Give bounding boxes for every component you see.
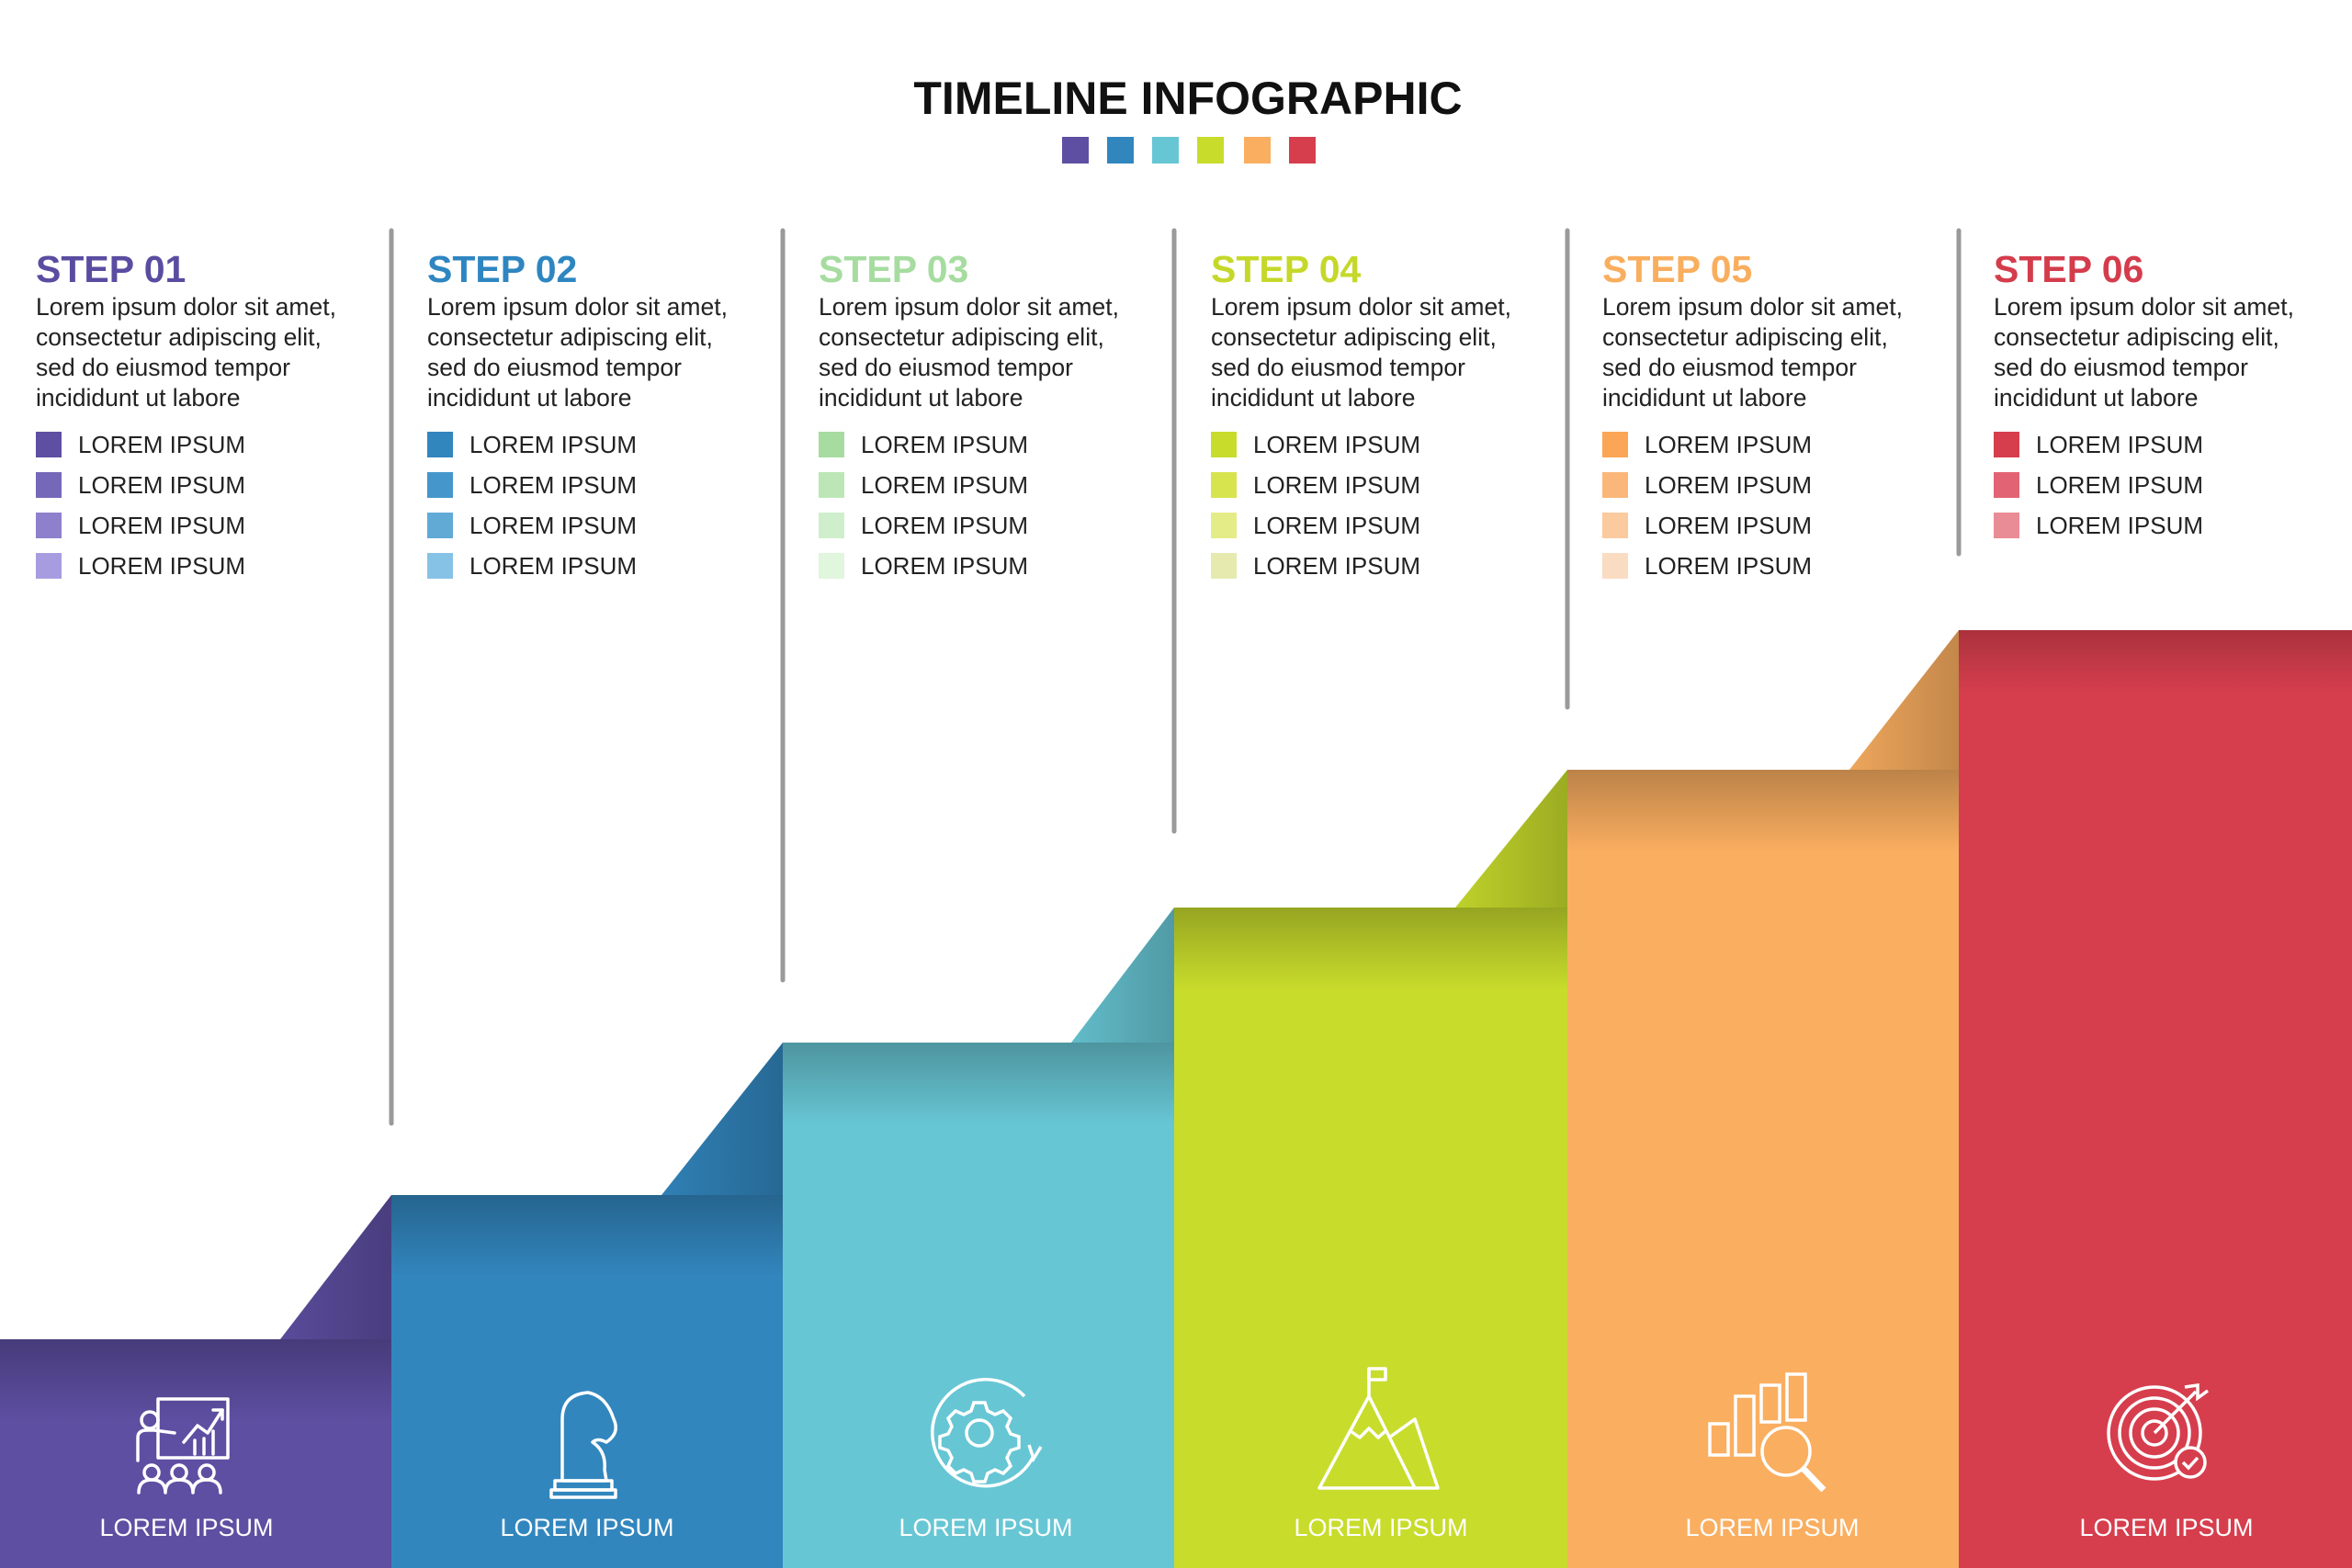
bottom labels: LOREM IPSUM: [99, 1514, 274, 1541]
step 06 text: LOREM IPSUM: [2036, 471, 2203, 499]
icon: bar chart search: [1710, 1374, 1824, 1490]
step 06 text: consectetur adipiscing elit,: [1994, 323, 2279, 351]
step 05 text: STEP 05: [1602, 248, 1752, 290]
step 03 text: Lorem ipsum dolor sit amet,: [819, 293, 1119, 321]
step 03 text: sed do eiusmod tempor: [819, 354, 1073, 381]
step 01 text: LOREM IPSUM: [78, 431, 245, 458]
step 05 text: LOREM IPSUM: [1645, 431, 1812, 458]
icon: chess knight: [551, 1393, 616, 1497]
step 05 text: sed do eiusmod tempor: [1602, 354, 1857, 381]
step 4 block: [1174, 770, 1567, 1568]
step 01 text: [36, 248, 336, 580]
step 04 text: Lorem ipsum dolor sit amet,: [1211, 293, 1511, 321]
step 06 text: LOREM IPSUM: [2036, 512, 2203, 539]
step 5 block: [1567, 630, 1959, 1568]
color squares: [1062, 137, 1316, 164]
step 04 text: [1211, 248, 1511, 580]
step 03 text: LOREM IPSUM: [861, 471, 1028, 499]
bottom labels: LOREM IPSUM: [500, 1514, 674, 1541]
step 05 text: [1602, 248, 1903, 580]
step 05 text: incididunt ut labore: [1602, 384, 1806, 412]
step 01 text: sed do eiusmod tempor: [36, 354, 290, 381]
step 01 text: LOREM IPSUM: [78, 552, 245, 580]
icon: target: [2109, 1385, 2208, 1479]
step 1 block: [0, 1195, 391, 1568]
step 02 text: sed do eiusmod tempor: [427, 354, 682, 381]
bottom labels: [99, 1514, 2254, 1541]
step 02 text: LOREM IPSUM: [469, 471, 637, 499]
step 02 text: LOREM IPSUM: [469, 552, 637, 580]
step 03 text: [819, 248, 1119, 580]
step 02 text: Lorem ipsum dolor sit amet,: [427, 293, 728, 321]
step 06 text: sed do eiusmod tempor: [1994, 354, 2248, 381]
step 05 text: Lorem ipsum dolor sit amet,: [1602, 293, 1903, 321]
step 06 text: Lorem ipsum dolor sit amet,: [1994, 293, 2294, 321]
step 04 text: STEP 04: [1211, 248, 1361, 290]
step 02 text: LOREM IPSUM: [469, 512, 637, 539]
bottom labels: LOREM IPSUM: [1294, 1514, 1468, 1541]
step 03 text: LOREM IPSUM: [861, 552, 1028, 580]
step 03 text: LOREM IPSUM: [861, 512, 1028, 539]
step 01 text: STEP 01: [36, 248, 186, 290]
title: TIMELINE INFOGRAPHIC: [913, 73, 1463, 124]
step 06 text: incididunt ut labore: [1994, 384, 2198, 412]
step 04 text: sed do eiusmod tempor: [1211, 354, 1465, 381]
step 2 block: [391, 1043, 783, 1568]
step 01 text: LOREM IPSUM: [78, 512, 245, 539]
bottom labels: LOREM IPSUM: [2079, 1514, 2254, 1541]
icon: mountain flag: [1319, 1369, 1438, 1488]
step 05 text: LOREM IPSUM: [1645, 512, 1812, 539]
step 05 text: consectetur adipiscing elit,: [1602, 323, 1888, 351]
bottom labels: LOREM IPSUM: [1685, 1514, 1860, 1541]
step 06 text: [1994, 248, 2294, 539]
step 04 text: LOREM IPSUM: [1253, 431, 1420, 458]
step 06 text: LOREM IPSUM: [2036, 431, 2203, 458]
step 05 text: LOREM IPSUM: [1645, 552, 1812, 580]
step 04 text: incididunt ut labore: [1211, 384, 1415, 412]
step 01 text: LOREM IPSUM: [78, 471, 245, 499]
step 02 text: [427, 248, 728, 580]
step 06 text: STEP 06: [1994, 248, 2143, 290]
step 01 text: consectetur adipiscing elit,: [36, 323, 322, 351]
step 03 text: incididunt ut labore: [819, 384, 1023, 412]
step 03 text: STEP 03: [819, 248, 968, 290]
icon: gear cycle: [933, 1380, 1041, 1486]
step 02 text: LOREM IPSUM: [469, 431, 637, 458]
step 02 text: consectetur adipiscing elit,: [427, 323, 713, 351]
step 02 text: incididunt ut labore: [427, 384, 631, 412]
bottom labels: LOREM IPSUM: [899, 1514, 1073, 1541]
step 04 text: LOREM IPSUM: [1253, 471, 1420, 499]
step 04 text: LOREM IPSUM: [1253, 552, 1420, 580]
icon: presentation: [138, 1399, 228, 1493]
step 01 text: Lorem ipsum dolor sit amet,: [36, 293, 336, 321]
step 04 text: LOREM IPSUM: [1253, 512, 1420, 539]
step 01 text: incididunt ut labore: [36, 384, 240, 412]
step 03 text: LOREM IPSUM: [861, 431, 1028, 458]
step 03 text: consectetur adipiscing elit,: [819, 323, 1104, 351]
step 3 block: [783, 908, 1174, 1568]
step 02 text: STEP 02: [427, 248, 577, 290]
step 04 text: consectetur adipiscing elit,: [1211, 323, 1497, 351]
step 6 block: [1959, 630, 2352, 1568]
step 05 text: LOREM IPSUM: [1645, 471, 1812, 499]
